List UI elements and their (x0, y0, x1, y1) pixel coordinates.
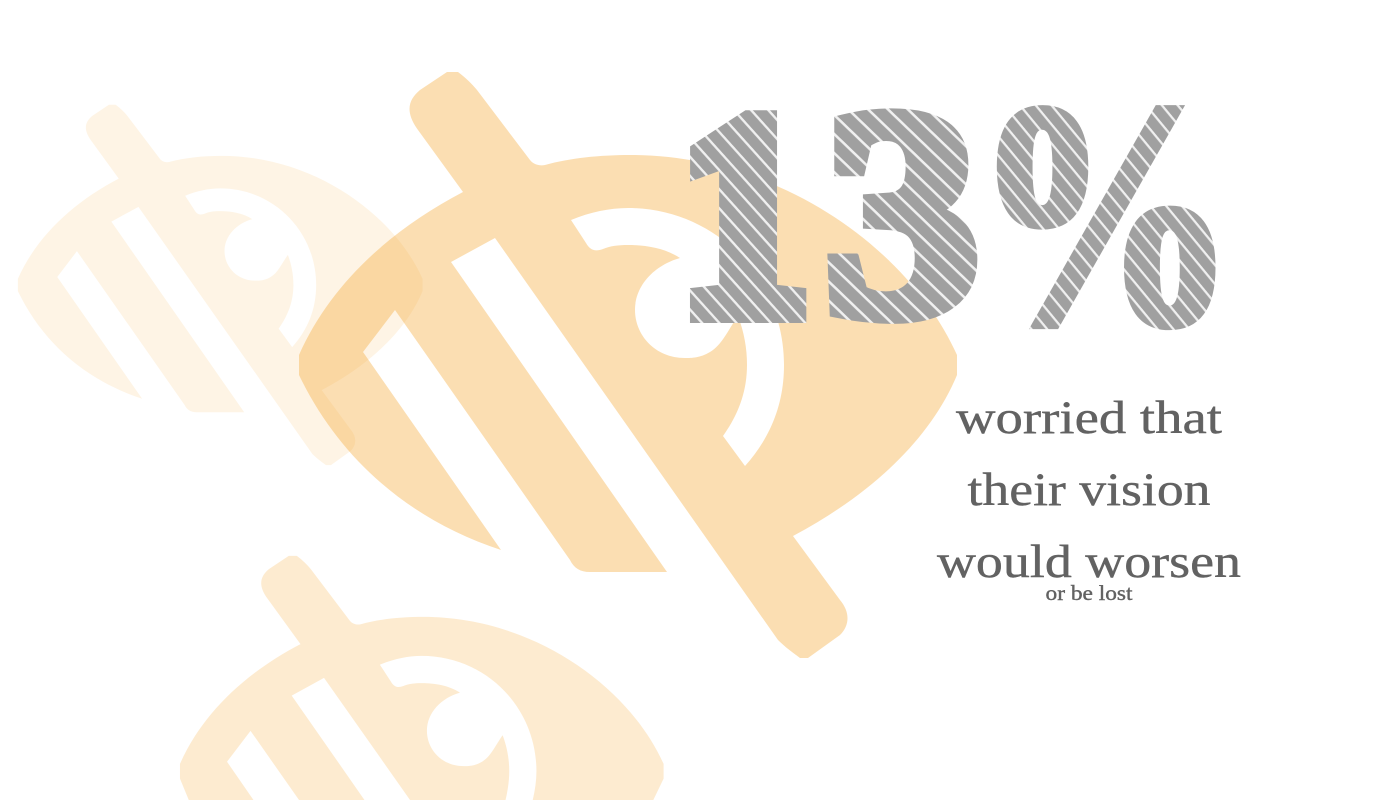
caption text: would worsen (937, 536, 1241, 588)
caption text: or be lost (1046, 581, 1133, 605)
big striped statistic: 13%: % (974, 39, 1236, 390)
caption text: worried that (956, 392, 1222, 444)
big striped statistic: 13% (680, 39, 1236, 390)
big striped statistic: 13%: 3 (826, 50, 978, 376)
icon: faded crossed-out eye, top left (18, 105, 423, 465)
icon: crossed-out eye, bottom, cropped by the page edge (180, 556, 664, 800)
caption text (937, 392, 1241, 605)
icon: large crossed-out eye (299, 72, 957, 658)
big striped statistic: 13%: 1 (680, 57, 809, 373)
caption text: their vision (968, 464, 1210, 516)
